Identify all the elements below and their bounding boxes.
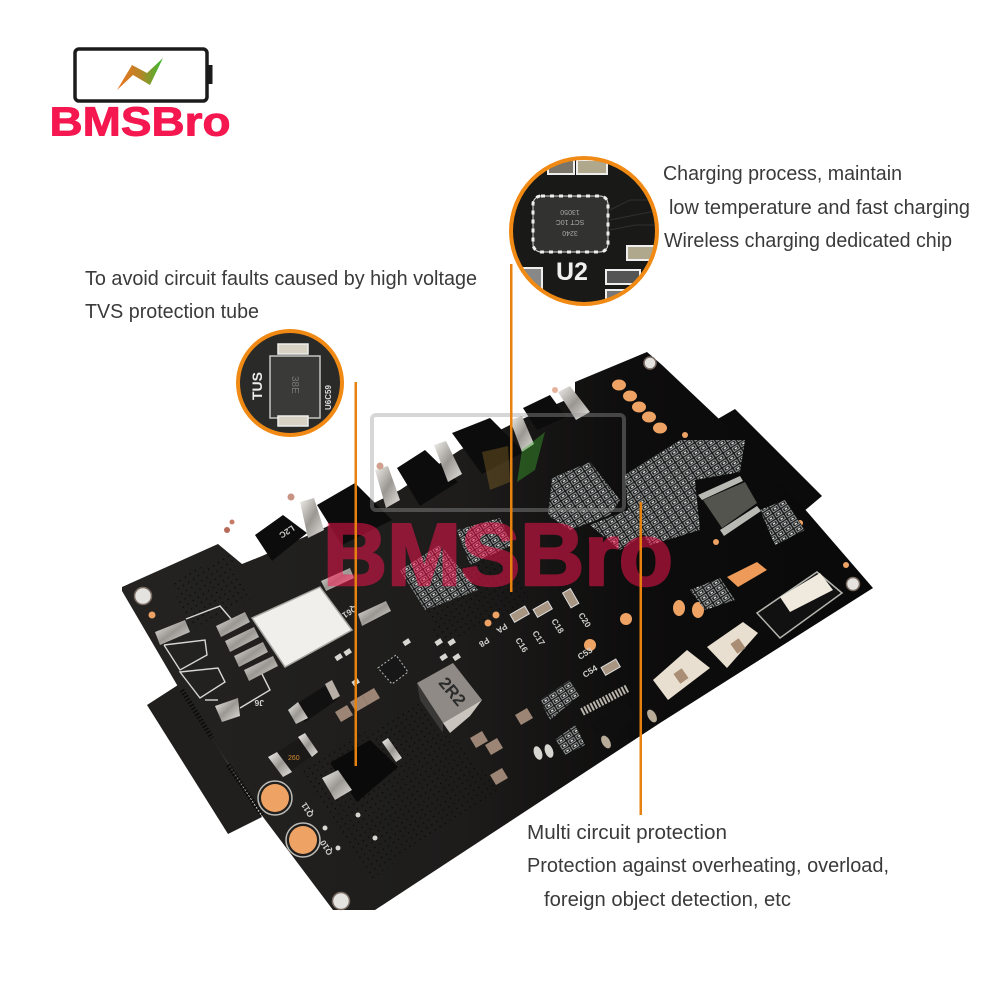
caption: TVS: TVS protection tube [85,301,259,323]
board silk labels: J6 [254,698,264,708]
chip marking [556,208,584,236]
power inductor 2R2: 2R2 [435,674,469,710]
leader line [640,502,642,815]
right ribbon tab [716,409,822,512]
TVS labels: TUS [249,372,265,400]
callout: wireless charging chip [510,158,970,592]
board silk labels: C54 [581,663,599,680]
caption: wireless charging: Wireless charging dedicated chip [664,230,952,252]
label U2: U2 [556,258,588,286]
small silver pads [322,638,555,850]
magnifier: TVS diode: 38E [289,376,300,394]
silk outline: J6 connector [164,606,270,708]
J6 solder pads [155,612,278,722]
caption: wireless charging [663,163,970,252]
callout: multi circuit protection [527,502,889,911]
capacitors near U2 [510,589,620,675]
magnifier: TVS diode [238,331,342,435]
watermark: battery outline [372,415,624,510]
top edge components [255,395,566,561]
board body [122,352,873,910]
caption: TVS: To avoid circuit faults caused by high voltage [85,268,477,290]
fuse component [268,733,318,777]
board silk labels: Q10 [318,838,335,857]
chip package [533,196,608,252]
coil spring [582,688,659,750]
caption: protection: Multi circuit protection [527,822,727,844]
chip marking: SCT 10C [556,218,584,225]
diode [288,680,340,724]
chip marking: 3240 [562,229,578,236]
magnifier: TVS diode: U6C59 [324,385,333,410]
board silk labels [254,523,599,857]
large SOP chip [698,476,761,536]
icon: battery outline [75,49,212,101]
watermark: BMSBro: BMSBro [323,505,673,604]
logo: BMSBro [50,49,230,144]
neighbouring parts [520,160,659,304]
main MOSFET [322,738,402,802]
pad rings [258,781,320,857]
SMD component cluster: upper right [400,440,805,755]
ribbon contacts [182,690,262,815]
board silk labels: C16 [513,636,530,654]
small IC [378,655,408,684]
left ribbon tab [147,685,262,834]
board silk labels: Q61 [340,603,359,621]
board silk labels: L2C [277,523,296,540]
via dots [170,550,530,880]
leader line [354,382,357,766]
caption: protection [527,822,889,911]
board silk labels: C20 [576,611,593,629]
pads beside window [321,568,391,626]
orange test pads [148,380,849,854]
leader line [510,264,512,592]
logo wordmark: BMSBro [50,98,230,144]
fuse component: 260 [288,755,300,762]
board silk labels: P8 [477,635,491,650]
icon: lightning bolt [117,58,163,90]
magnifier: U2 chip [511,158,660,304]
board silk labels: C18 [549,617,566,635]
small capacitors [335,688,533,785]
TVS leads [278,344,308,426]
board silk labels: Q11 [299,800,316,819]
caption: protection: Protection against overheating, overload, [527,855,889,877]
callout: TVS protection tube [85,268,477,766]
JST socket openings [673,638,746,684]
caption: protection: foreign object detection, etc [544,889,791,911]
solder tabs and copper leads [224,386,590,538]
white connector large [757,572,842,638]
power inductor 2R2 [417,663,482,733]
chip marking: 13050 [560,208,580,215]
traces [610,200,660,230]
orange connector pads [727,562,767,587]
mounting holes [134,357,860,910]
circuit board photo [122,352,873,910]
white cutout window [252,587,352,667]
board silk labels: C17 [530,629,547,647]
caption: TVS [85,268,477,323]
board silk labels: PA [495,621,509,636]
TVS package [270,356,320,418]
chip pads [533,196,608,252]
caption: wireless charging: low temperature and fast charging [669,197,970,219]
caption: wireless charging: Charging process, maintain [663,163,902,185]
board silk labels: C53 [576,645,594,662]
white JST connectors [653,622,758,700]
